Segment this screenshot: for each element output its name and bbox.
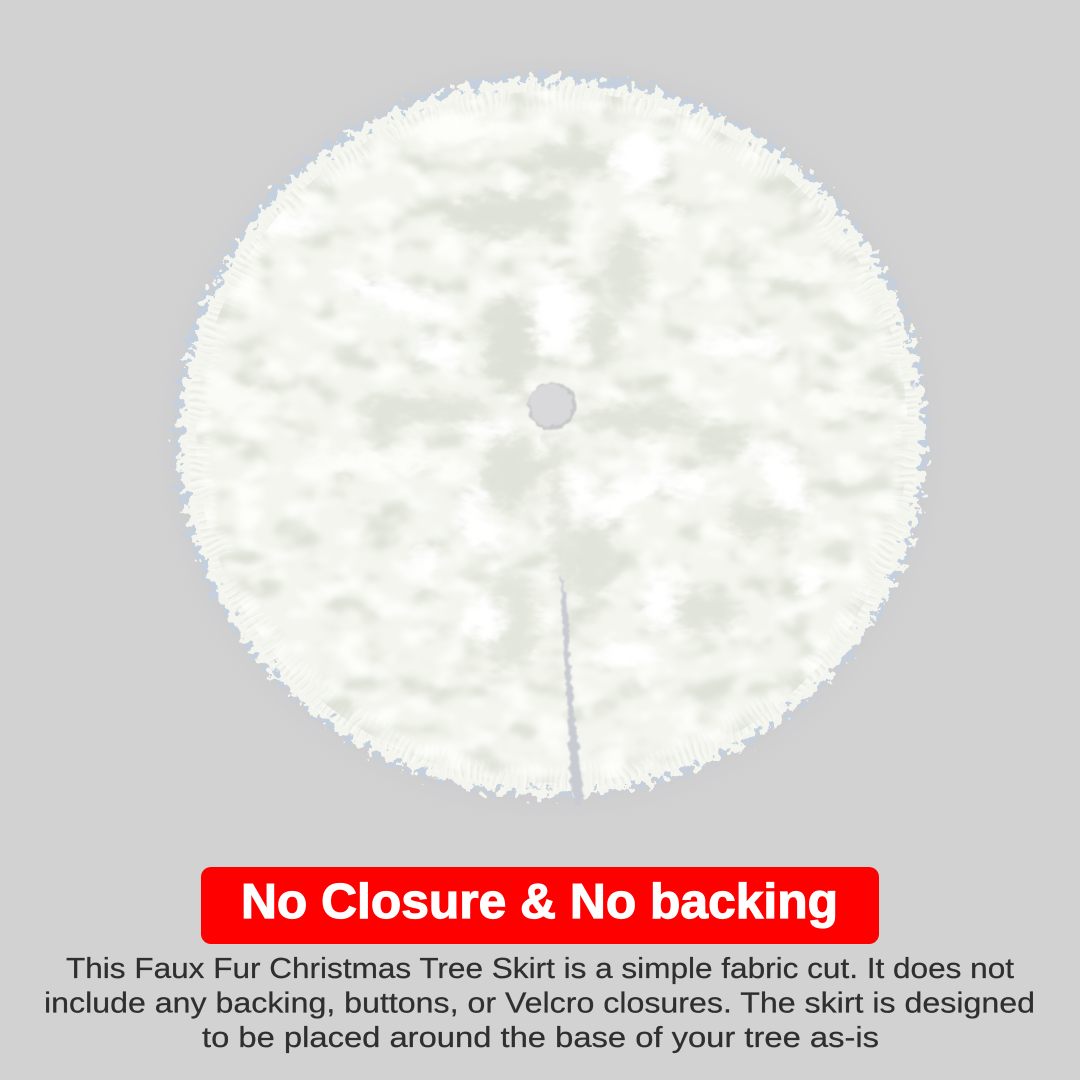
slit lower opening — [561, 570, 583, 806]
red heading banner — [201, 867, 879, 944]
product photo: white faux fur tree skirt — [174, 71, 930, 806]
soft shadow around skirt — [174, 71, 930, 803]
tonal mottling: shadow — [190, 85, 915, 790]
description line 3: to be placed around the base of your tree as-is — [202, 1022, 879, 1054]
description text block — [44, 953, 1035, 1054]
heading text: No Closure & No backing — [241, 875, 838, 929]
description line 1: This Faux Fur Christmas Tree Skirt is a simple fabric cut. It does not — [66, 953, 1014, 985]
fur shading and highlights — [190, 85, 915, 790]
rim hair strands — [195, 93, 909, 781]
tonal mottling: light — [190, 85, 915, 790]
blue fringe — [175, 74, 927, 796]
slit from centre to hem — [548, 430, 583, 806]
highlights — [532, 272, 580, 352]
slit upper crease — [548, 430, 568, 590]
description line 2: include any backing, buttons, or Velcro closures. The skirt is designed — [44, 988, 1035, 1020]
fur body with spiky edge — [180, 79, 924, 795]
centre hole — [528, 382, 576, 430]
shadows — [445, 193, 565, 237]
